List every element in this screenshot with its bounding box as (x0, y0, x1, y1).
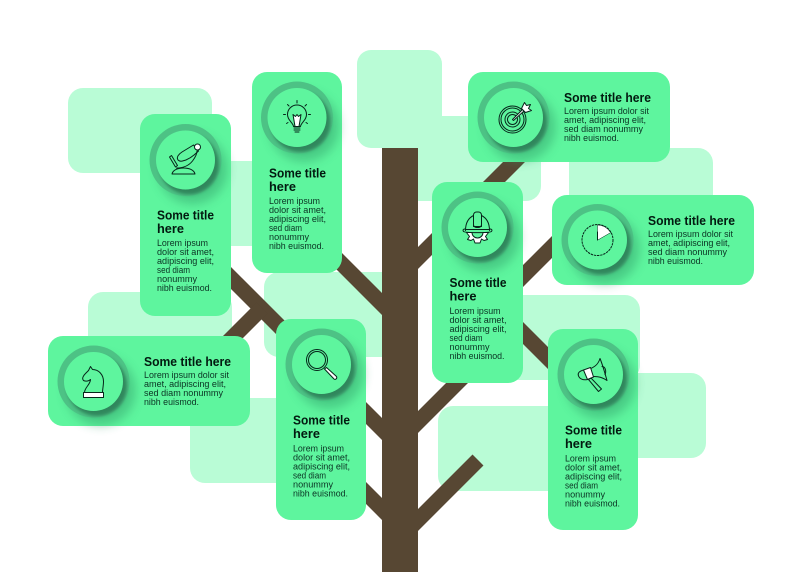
panel: microscope card (140, 114, 231, 316)
heading: magnifier card (293, 412, 350, 441)
text block: lightbulb card: sed diam (269, 223, 302, 233)
text block: megaphone card: adipiscing elit, (565, 472, 622, 482)
tree trunk and branches (200, 148, 560, 572)
heading: lightbulb card: Some title (269, 166, 326, 180)
panel: magnifier card (276, 319, 366, 520)
heading: microscope card (157, 208, 214, 236)
text block: megaphone card (565, 454, 622, 508)
text block: target card: sed diam nonummy (564, 124, 643, 134)
text block: magnifier card: nonummy (293, 480, 334, 490)
heading: megaphone card (565, 422, 622, 451)
panel: target card (468, 72, 670, 162)
panel: lightbulb card (252, 72, 342, 273)
text block: target card: nibh euismod. (564, 133, 619, 143)
text block: chess knight card: amet, adipiscing elit, (144, 379, 226, 389)
text block: chess knight card: sed diam nonummy (144, 388, 223, 398)
heading: lightbulb card: here (269, 179, 296, 194)
text block: magnifier card (293, 444, 350, 498)
text block: chess knight card: nibh euismod. (144, 397, 199, 407)
text block: target card (564, 106, 649, 143)
text block: lightbulb card: nonummy (269, 232, 310, 242)
heading: chess knight card: Some title here (144, 354, 231, 369)
text block: hard hat card: Lorem ipsum (450, 306, 500, 316)
heading: magnifier card: here (293, 426, 320, 441)
text block: magnifier card: nibh euismod. (293, 488, 348, 498)
icon: clock with shaded quarter (582, 224, 613, 256)
icon: hard hat and gear (463, 212, 492, 243)
text block: magnifier card: Lorem ipsum (293, 444, 344, 454)
text block: megaphone card: Lorem ipsum (565, 454, 616, 464)
text block: hard hat card: nonummy (450, 342, 490, 352)
text block: lightbulb card: Lorem ipsum (269, 196, 320, 206)
icon: microscope (170, 144, 200, 174)
text block: hard hat card: adipiscing elit, (450, 324, 506, 334)
text block: megaphone card: nibh euismod. (565, 498, 620, 508)
text block: megaphone card: dolor sit amet, (565, 462, 622, 472)
text block: hard hat card (450, 306, 506, 361)
icon: lightbulb (284, 100, 310, 132)
heading: magnifier card: Some title (293, 412, 350, 428)
text block: megaphone card: sed diam (565, 480, 598, 490)
icon: chess knight (83, 366, 104, 398)
text block: clock card: Lorem ipsum dolor sit (648, 229, 733, 239)
text block: target card: amet, adipiscing elit, (564, 115, 646, 125)
text block: microscope card: sed diam (157, 265, 190, 275)
text block: hard hat card: sed diam (450, 333, 482, 343)
icon: target with arrow (499, 102, 532, 133)
text block: megaphone card: nonummy (565, 490, 606, 500)
text block: magnifier card: sed diam (293, 470, 326, 480)
text block: hard hat card: dolor sit amet, (450, 315, 506, 325)
text block: hard hat card: nibh euismod. (450, 351, 504, 361)
text block: microscope card: Lorem ipsum (157, 238, 208, 248)
heading: megaphone card: Some title (565, 422, 622, 438)
text block: microscope card: adipiscing elit, (157, 256, 214, 266)
panel: clock card (552, 195, 754, 285)
text block: lightbulb card (269, 196, 326, 251)
icon: magnifying glass (306, 350, 337, 379)
text block: clock card: nibh euismod. (648, 256, 703, 266)
text block: clock card (648, 229, 733, 266)
text block: microscope card: nonummy (157, 274, 198, 284)
heading: hard hat card (450, 275, 506, 304)
heading: megaphone card: here (565, 436, 592, 451)
text block: magnifier card: dolor sit amet, (293, 452, 350, 462)
panel: hard hat card (432, 182, 523, 383)
background leaf blocks (68, 50, 713, 491)
text block: magnifier card: adipiscing elit, (293, 462, 350, 472)
icon: megaphone (578, 358, 607, 392)
heading: lightbulb card (269, 166, 326, 194)
heading: microscope card: Some title (157, 208, 214, 222)
panel: chess knight card (48, 336, 250, 426)
text block: microscope card: dolor sit amet, (157, 247, 214, 257)
text block: clock card: amet, adipiscing elit, (648, 238, 730, 248)
heading: microscope card: here (157, 221, 184, 236)
text block: microscope card (157, 238, 214, 293)
text block: chess knight card (144, 370, 229, 407)
text block: microscope card: nibh euismod. (157, 283, 212, 293)
heading: hard hat card: here (450, 288, 476, 304)
panel: megaphone card (548, 329, 638, 530)
text block: lightbulb card: nibh euismod. (269, 241, 324, 251)
heading: hard hat card: Some title (450, 275, 506, 290)
text block: lightbulb card: dolor sit amet, (269, 205, 326, 215)
text block: lightbulb card: adipiscing elit, (269, 214, 326, 224)
heading: target card: Some title here (564, 90, 651, 105)
text block: clock card: sed diam nonummy (648, 247, 727, 257)
text block: target card: Lorem ipsum dolor sit (564, 106, 649, 116)
text block: chess knight card: Lorem ipsum dolor sit (144, 370, 229, 380)
heading: clock card: Some title here (648, 213, 735, 228)
